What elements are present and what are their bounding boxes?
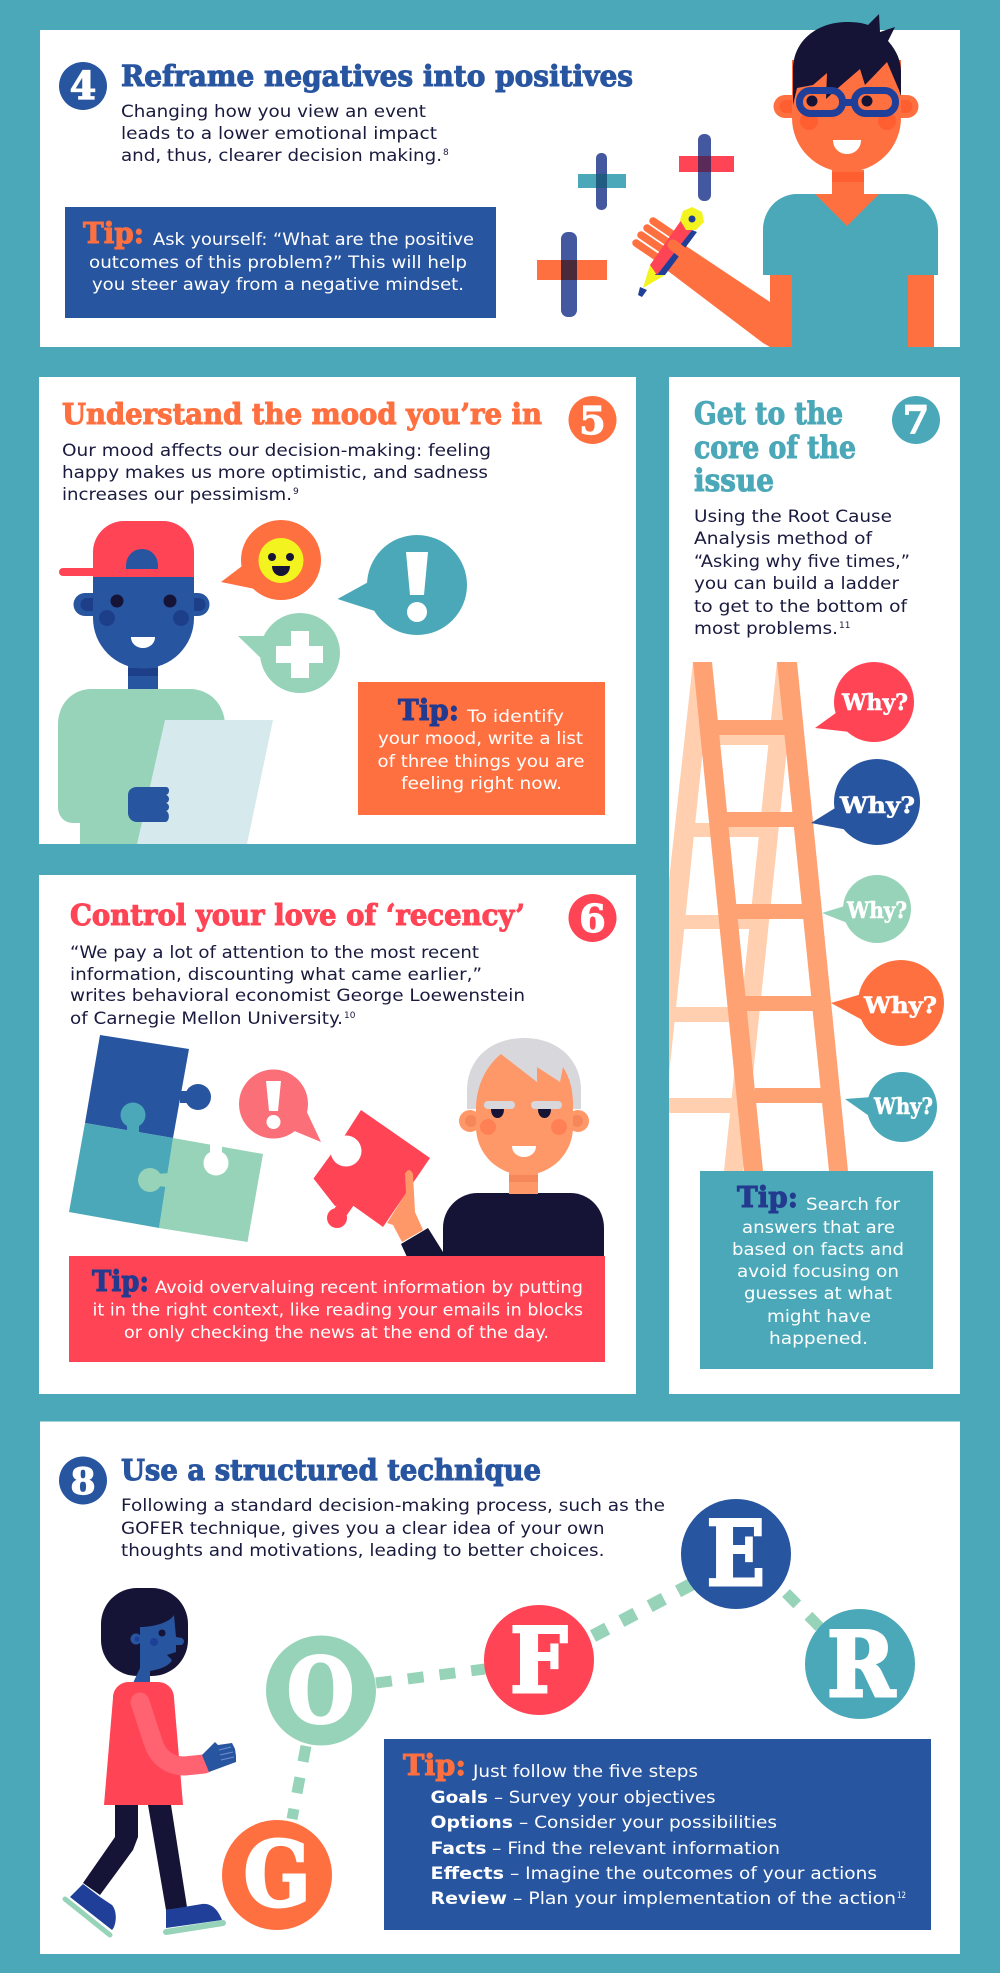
letter circle: E: [681, 1499, 791, 1609]
speech bubble: why blue: Why?: [839, 793, 915, 819]
letter circle: F: [484, 1605, 594, 1715]
body text: recency: “We pay a lot of attention to the most recent: [70, 943, 479, 963]
illustration: man with glasses and pen: [636, 14, 938, 347]
body text: mood: [62, 441, 491, 505]
tip box: five steps: [384, 1739, 931, 1930]
body text: structured technique: Following a standard decision-making process, such as the: [121, 1496, 665, 1516]
tip box: reframe: Ask yourself: “What are the positive: [153, 230, 474, 250]
panel: reframe negatives: [40, 14, 960, 347]
tip box: five steps: – Consider your possibilities: [519, 1813, 777, 1833]
panel: understand the mood: [39, 377, 636, 844]
letter circle: R: [805, 1609, 915, 1719]
body text: mood: increases our pessimism.: [62, 485, 292, 505]
tip box: mood: feeling right now.: [401, 774, 562, 794]
tip box: five steps: Just follow the five steps: [472, 1762, 698, 1782]
tip box: five steps: – Plan your implementation of the action: [513, 1889, 896, 1909]
tip box: core: happened.: [769, 1329, 868, 1349]
body text: mood: Our mood affects our decision-making: feeling: [62, 441, 491, 461]
body text: structured technique: GOFER technique, gives you a clear idea of your own: [121, 1519, 604, 1539]
tip box: five steps: – Find the relevant information: [492, 1839, 780, 1859]
body text: structured technique: [121, 1496, 665, 1561]
number badge 6: [568, 894, 616, 942]
tip box: five steps: Options: [430, 1813, 513, 1833]
body text: core: “Asking why five times,”: [694, 552, 910, 572]
tip box: core: answers that are: [742, 1218, 895, 1238]
panel: control recency: [39, 875, 636, 1394]
illustration: ladder: [669, 662, 848, 1171]
letter circle: G: [222, 1820, 332, 1930]
tip box: reframe: Tip:: [83, 216, 144, 250]
number badge 8: [59, 1456, 107, 1504]
tip box: five steps: Facts: [430, 1839, 486, 1859]
number badge 4: [59, 62, 107, 110]
illustration: puzzle pieces: [69, 1035, 263, 1242]
panel: structured technique: [40, 1422, 960, 1954]
tip box: core: [700, 1171, 933, 1369]
tip box: core: might have: [767, 1307, 871, 1327]
tip box: recency: it in the right context, like reading your emails in blocks: [92, 1300, 583, 1320]
tip box: five steps: – Imagine the outcomes of your actions: [510, 1864, 877, 1884]
speech bubble: why red: Why?: [841, 690, 908, 716]
icon: teal plus: [578, 153, 626, 210]
body text: recency: 10: [344, 1011, 356, 1021]
speech bubble: why mint: Why?: [846, 898, 907, 924]
tip box: five steps: – Survey your objectives: [494, 1788, 716, 1808]
letter circle: G: G: [244, 1822, 311, 1928]
letter circle: F: F: [510, 1608, 568, 1714]
tip box: five steps: Effects: [430, 1864, 504, 1884]
heading: core of the issue: issue: [694, 463, 774, 499]
number badge 5: [568, 396, 616, 444]
heading: core of the issue: [694, 396, 856, 499]
body text: core: Using the Root Cause: [694, 507, 892, 527]
icon: orange plus: [537, 232, 607, 317]
body text: structured technique: thoughts and motivations, leading to better choices.: [121, 1541, 604, 1561]
icon: red plus: [679, 134, 734, 201]
tip box: mood: To identify: [466, 707, 564, 727]
tip box: mood: your mood, write a list: [378, 729, 583, 749]
number badge 6: 6: [579, 896, 606, 941]
tip box: reframe: [65, 207, 496, 318]
body text: core: you can build a ladder: [694, 574, 899, 594]
tip box: five steps: Review: [430, 1889, 507, 1909]
tip box: core: avoid focusing on: [737, 1262, 899, 1282]
body text: reframe: Changing how you view an event: [121, 102, 426, 122]
speech bubble: why blue: [811, 759, 920, 845]
dashed connectors between letters: [292, 1584, 820, 1819]
body text: reframe: 8: [443, 148, 449, 158]
tip box: core: Tip:: [737, 1180, 798, 1214]
heading: reframe: Reframe negatives into positives: [121, 59, 633, 93]
letter circle: O: O: [287, 1638, 354, 1744]
body text: core: most problems.: [694, 619, 838, 639]
body text: reframe: [121, 102, 449, 166]
tip box: reframe: outcomes of this problem?” This will help: [89, 253, 467, 273]
number badge 5: 5: [579, 398, 606, 443]
tip box: five steps: Tip:: [403, 1748, 466, 1782]
body text: recency: information, discounting what came earlier,”: [70, 965, 482, 985]
letter circle: O: [266, 1636, 376, 1746]
illustration: red puzzle piece: [314, 1110, 430, 1228]
tip box: recency: Tip:: [92, 1264, 149, 1298]
tip box: reframe: you steer away from a negative mindset.: [92, 275, 464, 295]
body text: mood: happy makes us more optimistic, and sadness: [62, 463, 488, 483]
body text: core: [694, 507, 910, 639]
heading: structured technique: Use a structured technique: [121, 1453, 541, 1487]
tip box: core: based on facts and: [732, 1240, 904, 1260]
illustration: walking woman: [65, 1588, 236, 1935]
speech bubble: why teal: [845, 1072, 937, 1142]
body text: recency: [70, 943, 525, 1029]
heading: recency: Control your love of ‘recency’: [70, 898, 525, 932]
tip box: recency: [69, 1256, 605, 1362]
heading: mood: Understand the mood you’re in: [62, 397, 542, 431]
panel: get to the core: [669, 377, 960, 1394]
speech bubble: why teal: Why?: [873, 1094, 933, 1120]
heading: core of the issue: Get to the: [694, 396, 843, 432]
tip box: core: guesses at what: [744, 1284, 892, 1304]
tip box: recency: or only checking the news at the end of the day.: [124, 1323, 549, 1343]
body text: core: Analysis method of: [694, 529, 873, 549]
illustration: boy in red cap with paper: [58, 521, 273, 844]
number badge 4: 4: [70, 63, 96, 108]
number badge 7: 7: [903, 397, 929, 442]
tip box: five steps: 12: [897, 1891, 906, 1901]
illustration: older man: [387, 1038, 604, 1257]
heading: core of the issue: core of the: [694, 430, 856, 466]
tip box: core: Search for: [806, 1195, 900, 1215]
speech bubble: plus: [238, 613, 340, 693]
speech bubble: exclamation red: [239, 1070, 321, 1142]
body text: reframe: and, thus, clearer decision making.: [121, 146, 442, 166]
speech bubble: why orange: [831, 960, 944, 1046]
speech bubble: why mint: [822, 875, 911, 943]
tip box: five steps: Goals: [430, 1788, 488, 1808]
tip box: mood: of three things you are: [378, 752, 584, 772]
speech bubble: exclamation: [338, 535, 467, 635]
number badge 7: [892, 396, 940, 444]
body text: recency: writes behavioral economist George Loewenstein: [70, 986, 525, 1006]
body text: mood: 9: [293, 487, 299, 497]
speech bubble: smiley: [221, 520, 321, 600]
tip box: mood: Tip:: [398, 693, 459, 727]
letter circle: R: R: [827, 1612, 896, 1718]
tip box: recency: Avoid overvaluing recent information by putting: [155, 1278, 583, 1298]
speech bubble: why orange: Why?: [863, 993, 937, 1019]
body text: reframe: leads to a lower emotional impact: [121, 124, 437, 144]
tip box: mood: [358, 682, 605, 815]
speech bubble: why red: [815, 662, 914, 742]
letter circle: E: E: [707, 1501, 765, 1607]
body text: core: 11: [839, 621, 850, 631]
body text: core: to get to the bottom of: [694, 597, 908, 617]
number badge 8: 8: [70, 1461, 96, 1503]
body text: recency: of Carnegie Mellon University.: [70, 1009, 343, 1029]
